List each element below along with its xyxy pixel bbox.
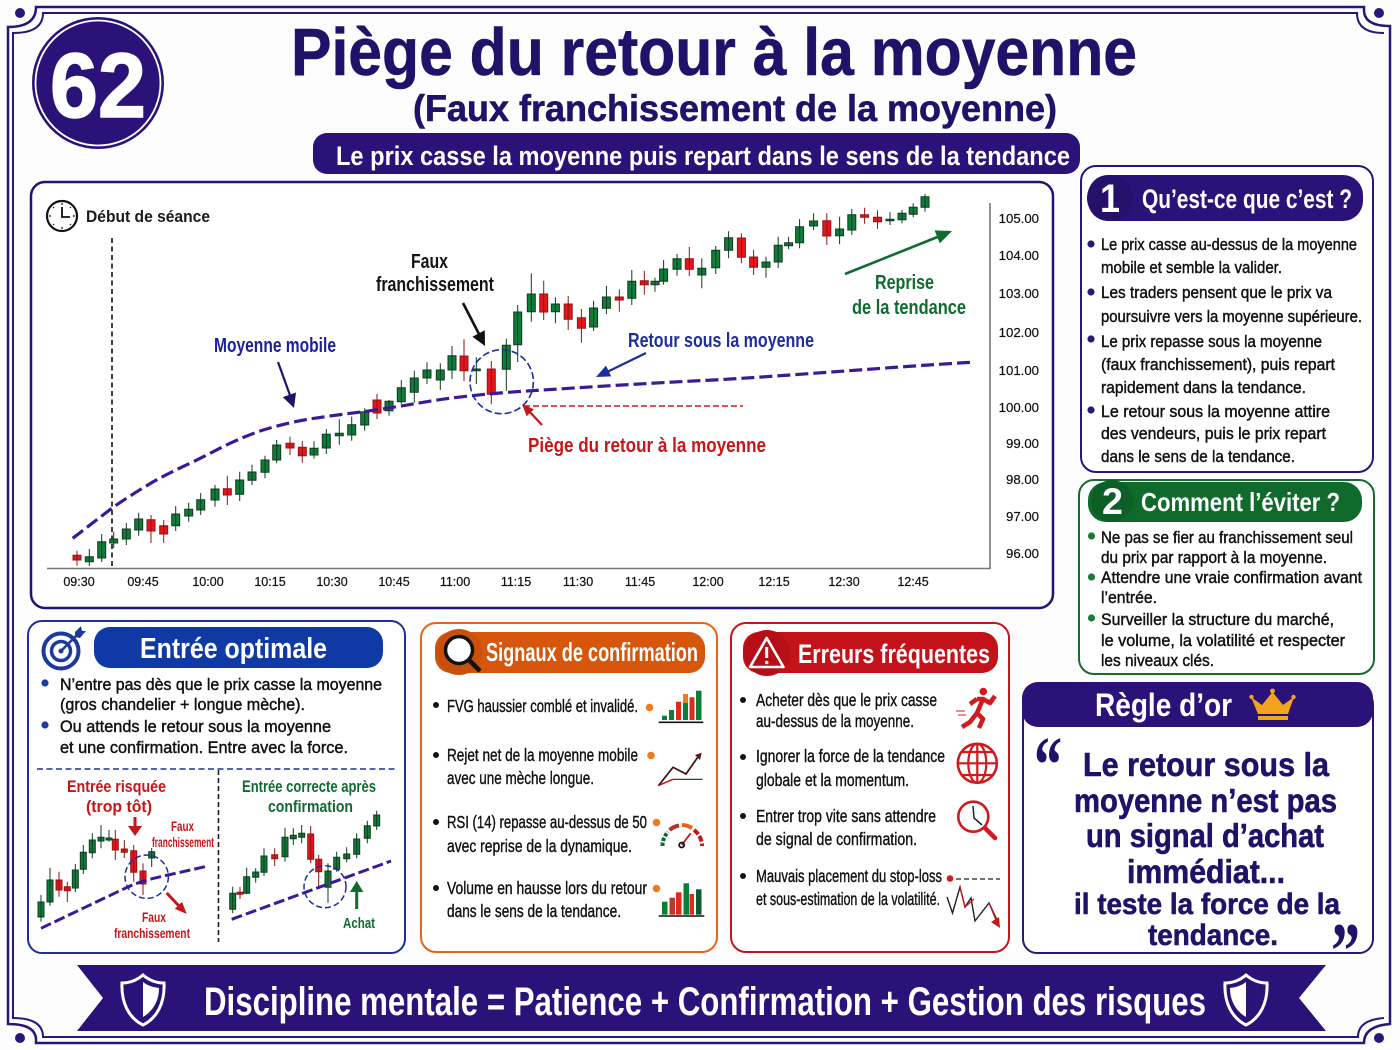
bullet list: N’entre pas dès que le prix casse la moyenne [60, 675, 382, 694]
bullet list: Surveiller la structure du marché, [1101, 610, 1334, 629]
trap zone circle [470, 350, 533, 414]
icon: magnifier [446, 636, 480, 671]
mini chart: risky entry: Entrée risquée [67, 777, 166, 796]
price axis labels: 103.00 [999, 286, 1039, 301]
bullet list: des vendeurs, puis le prix repart [1101, 424, 1326, 443]
signal list: RSI (14) repasse au-dessus de 50 [447, 812, 647, 832]
icon: warning triangle [750, 638, 784, 667]
mini chart: correct entry: Achat [343, 915, 375, 932]
mini chart: risky entry: franchissement [114, 925, 190, 941]
panel: confirmation signals [421, 623, 717, 952]
time axis labels: 12:30 [828, 575, 860, 589]
rule text: Le retour sous la [1083, 746, 1330, 783]
signal list: FVG haussier comblé et invalidé. [447, 696, 638, 716]
bullet list: les niveaux clés. [1101, 651, 1214, 670]
annotation: moving average [214, 335, 336, 408]
rule text [1074, 746, 1340, 952]
closing quote: ” [1331, 908, 1360, 996]
bullet list [1087, 235, 1362, 466]
time axis labels: 10:15 [254, 575, 286, 589]
price axis labels [999, 211, 1039, 561]
rule text: tendance. [1148, 919, 1278, 952]
tagline banner: Le prix casse la moyenne puis repart dans le sens de la tendance [336, 141, 1070, 171]
bullet list: mobile et semble la valider. [1101, 258, 1282, 277]
time axis labels: 11:30 [563, 575, 593, 589]
bullet list: rapidement dans la tendance. [1101, 378, 1306, 397]
header: confirmation signals: Signaux de confirmation [486, 637, 698, 667]
moving average line [73, 362, 971, 538]
panel: frequent errors [731, 623, 1009, 952]
annotation: trend resumption: Reprise [875, 272, 934, 294]
time axis labels [63, 575, 929, 589]
mini chart: correct entry [230, 777, 391, 932]
annotation: false breakout: Faux [411, 251, 448, 273]
golden rule header: Règle d’or [1095, 687, 1232, 723]
annotation: return below average: Retour sous la moyenne [628, 330, 814, 352]
panel: what is it [1081, 166, 1373, 472]
mini chart: correct entry: Entrée correcte après [242, 777, 376, 796]
time axis labels: 09:45 [127, 575, 159, 589]
time axis labels: 12:15 [758, 575, 790, 589]
price axis labels: 105.00 [999, 211, 1039, 226]
icon: crown [1249, 689, 1296, 720]
price axis labels: 97.00 [1006, 509, 1039, 524]
price axis labels: 96.00 [1006, 546, 1039, 561]
bullet list: dans le sens de la tendance. [1101, 447, 1295, 466]
error list: au-dessus de la moyenne. [756, 711, 914, 731]
number badge 62 [32, 17, 164, 149]
mini chart: risky entry: (trop tôt) [86, 797, 152, 816]
subtitle: (Faux franchissement de la moyenne) [413, 88, 1057, 129]
time axis labels: 10:45 [378, 575, 410, 589]
panel: price chart [31, 182, 1053, 608]
bullet list: Attendre une vraie confirmation avant [1101, 568, 1362, 587]
icon: target [44, 626, 86, 668]
error list: Ignorer la force de la tendance [756, 746, 945, 766]
header 1: 1 [1100, 177, 1120, 221]
time axis labels: 12:45 [897, 575, 929, 589]
signal list: avec une mèche longue. [447, 768, 594, 788]
annotation: mean reversion trap [522, 404, 766, 457]
time axis labels: 11:15 [501, 575, 531, 589]
annotation: moving average: Moyenne mobile [214, 335, 336, 357]
header: confirmation signals [435, 629, 705, 675]
icon: shield left [122, 975, 164, 1025]
annotation: trend resumption [845, 230, 966, 319]
mini chart: risky entry [38, 777, 214, 941]
price axis labels: 100.00 [999, 400, 1039, 415]
golden rule header [1022, 682, 1373, 727]
opening quote: “ [1034, 722, 1062, 810]
bullet list: poursuivre vers la moyenne supérieure. [1101, 307, 1362, 326]
bullet list: l’entrée. [1101, 588, 1157, 607]
error list: Entrer trop vite sans attendre [756, 806, 936, 826]
header 2: 2 [1102, 481, 1123, 522]
signal list: Rejet net de la moyenne mobile [447, 745, 638, 765]
rule text: moyenne n’est pas [1074, 782, 1337, 819]
header 2 [1088, 480, 1362, 522]
error list: Acheter dès que le prix casse [756, 690, 937, 710]
icon: globe [958, 744, 997, 783]
header: frequent errors: Erreurs fréquentes [798, 639, 990, 669]
error list [740, 690, 945, 909]
signal list: dans le sens de la tendance. [447, 901, 621, 921]
annotation: false breakout [376, 251, 494, 346]
header: optimal entry [94, 627, 383, 668]
title: Piège du retour à la moyenne [291, 15, 1137, 90]
session start label: Début de séance [86, 207, 210, 226]
price axis labels: 104.00 [999, 248, 1039, 263]
price axis labels: 102.00 [999, 325, 1039, 340]
rule text: un signal d’achat [1086, 817, 1324, 854]
bullet list: Le prix repasse sous la moyenne [1101, 332, 1322, 351]
candlesticks [73, 194, 929, 566]
mini chart: risky entry: Faux [142, 909, 166, 925]
bullet list: Le prix casse au-dessus de la moyenne [1101, 235, 1357, 254]
time axis labels: 10:00 [192, 575, 224, 589]
signal list: Volume en hausse lors du retour [447, 878, 647, 898]
signal list: avec reprise de la dynamique. [447, 836, 632, 856]
panel: how to avoid [1079, 480, 1374, 674]
error list: globale et la momentum. [756, 770, 909, 790]
number badge 62: 62 [50, 35, 146, 137]
mini chart: risky entry: franchissement [152, 834, 214, 850]
price axis labels: 98.00 [1006, 472, 1039, 487]
icon: rising line [658, 753, 703, 786]
bullet list: Ou attends le retour sous la moyenne [60, 717, 331, 736]
header 1 [1087, 175, 1363, 221]
icon: clock magnifier [958, 802, 995, 838]
time axis labels: 09:30 [63, 575, 95, 589]
icon: runner [956, 688, 995, 728]
signal list [433, 696, 660, 921]
bullet list: Ne pas se fier au franchissement seul [1101, 528, 1353, 547]
error list: et sous-estimation de la volatilité. [756, 889, 940, 909]
rule text: il teste la force de la [1074, 888, 1340, 921]
price axis labels: 99.00 [1006, 436, 1039, 451]
annotation: trend resumption: de la tendance [852, 297, 966, 319]
bullet list: Le retour sous la moyenne attire [1101, 402, 1330, 421]
time axis labels: 11:00 [440, 575, 470, 589]
bullet list [1088, 528, 1362, 670]
tagline banner [313, 133, 1080, 174]
icon: shield right [1225, 975, 1267, 1025]
header 2: Comment l’éviter ? [1141, 487, 1340, 517]
footer banner [77, 965, 1326, 1031]
error list: Mauvais placement du stop-loss [756, 866, 942, 886]
bullet list: Les traders pensent que le prix va [1101, 283, 1332, 302]
bullet list: (faux franchissement), puis repart [1101, 355, 1335, 374]
header: frequent errors [743, 630, 998, 676]
rule text: immédiat... [1127, 853, 1285, 890]
annotation: false breakout: franchissement [376, 274, 494, 296]
annotation: return below average [596, 330, 814, 377]
axes [47, 203, 990, 568]
bullet list [41, 675, 382, 757]
session start line [111, 238, 113, 568]
time axis labels: 12:00 [692, 575, 724, 589]
icon: stop-loss volatility [947, 875, 1000, 928]
time axis labels: 11:45 [625, 575, 655, 589]
bullet list: (gros chandelier + longue mèche). [60, 695, 305, 714]
icon: gauge [662, 825, 702, 848]
icon: clock [47, 201, 77, 231]
price axis labels: 101.00 [999, 363, 1039, 378]
mini chart: correct entry: confirmation [268, 797, 353, 816]
bullet list: et une confirmation. Entre avec la force. [60, 738, 348, 757]
annotation: mean reversion trap: Piège du retour à la moyenne [528, 435, 766, 457]
panel: golden rule [1022, 682, 1373, 996]
error list: de signal de confirmation. [756, 829, 917, 849]
icon: bars 2 [659, 883, 704, 916]
bullet list: du prix par rapport à la moyenne. [1101, 548, 1327, 567]
mini chart: risky entry: Faux [171, 818, 194, 834]
header: optimal entry: Entrée optimale [140, 633, 327, 665]
bullet list: le volume, la volatilité et respecter [1101, 631, 1345, 650]
panel: optimal entry [28, 621, 405, 953]
icon: bars 1 [659, 691, 703, 722]
time axis labels: 10:30 [316, 575, 348, 589]
